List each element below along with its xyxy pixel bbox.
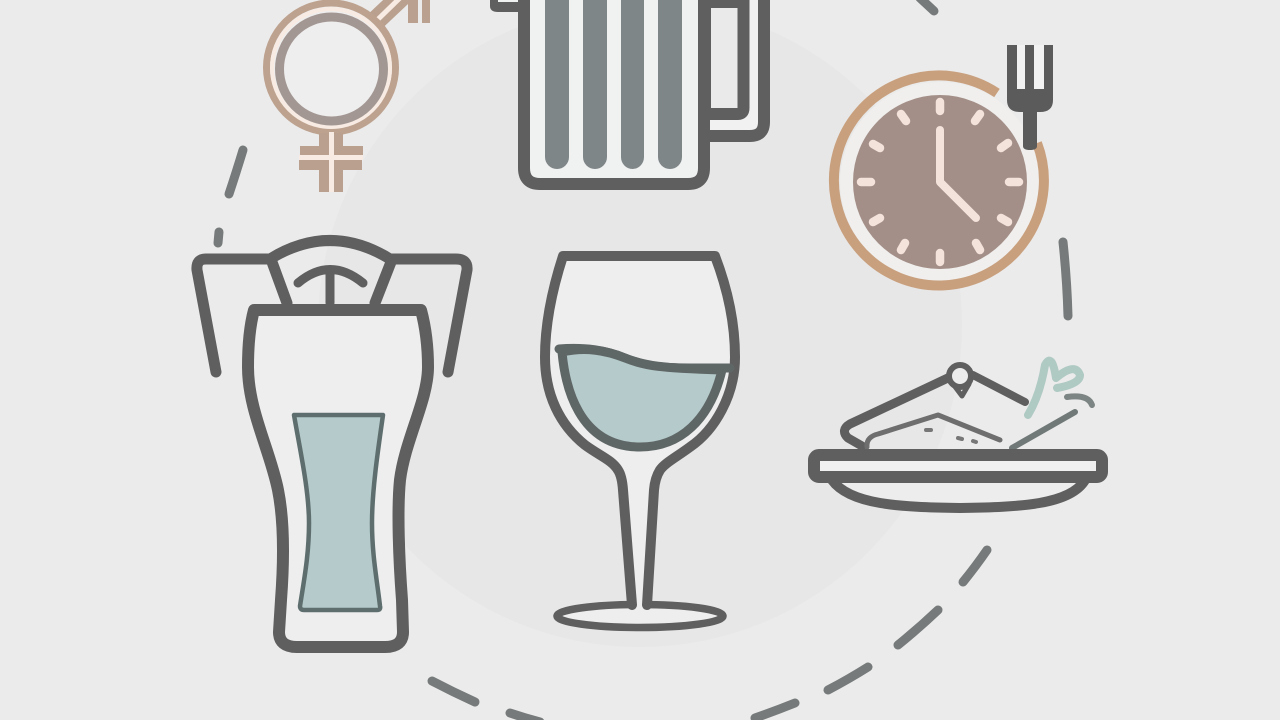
icon: gender symbol [266,0,430,192]
dashed ring [218,0,1068,720]
icon: beer mug [490,0,764,184]
fork [1007,45,1053,150]
background disc [318,3,962,647]
icon: pint glass [248,310,428,647]
icon: clock with fork [834,45,1053,285]
icon: plate of food [814,361,1102,508]
icon: wine glass [545,256,735,628]
icon: weighing scale [197,240,467,372]
